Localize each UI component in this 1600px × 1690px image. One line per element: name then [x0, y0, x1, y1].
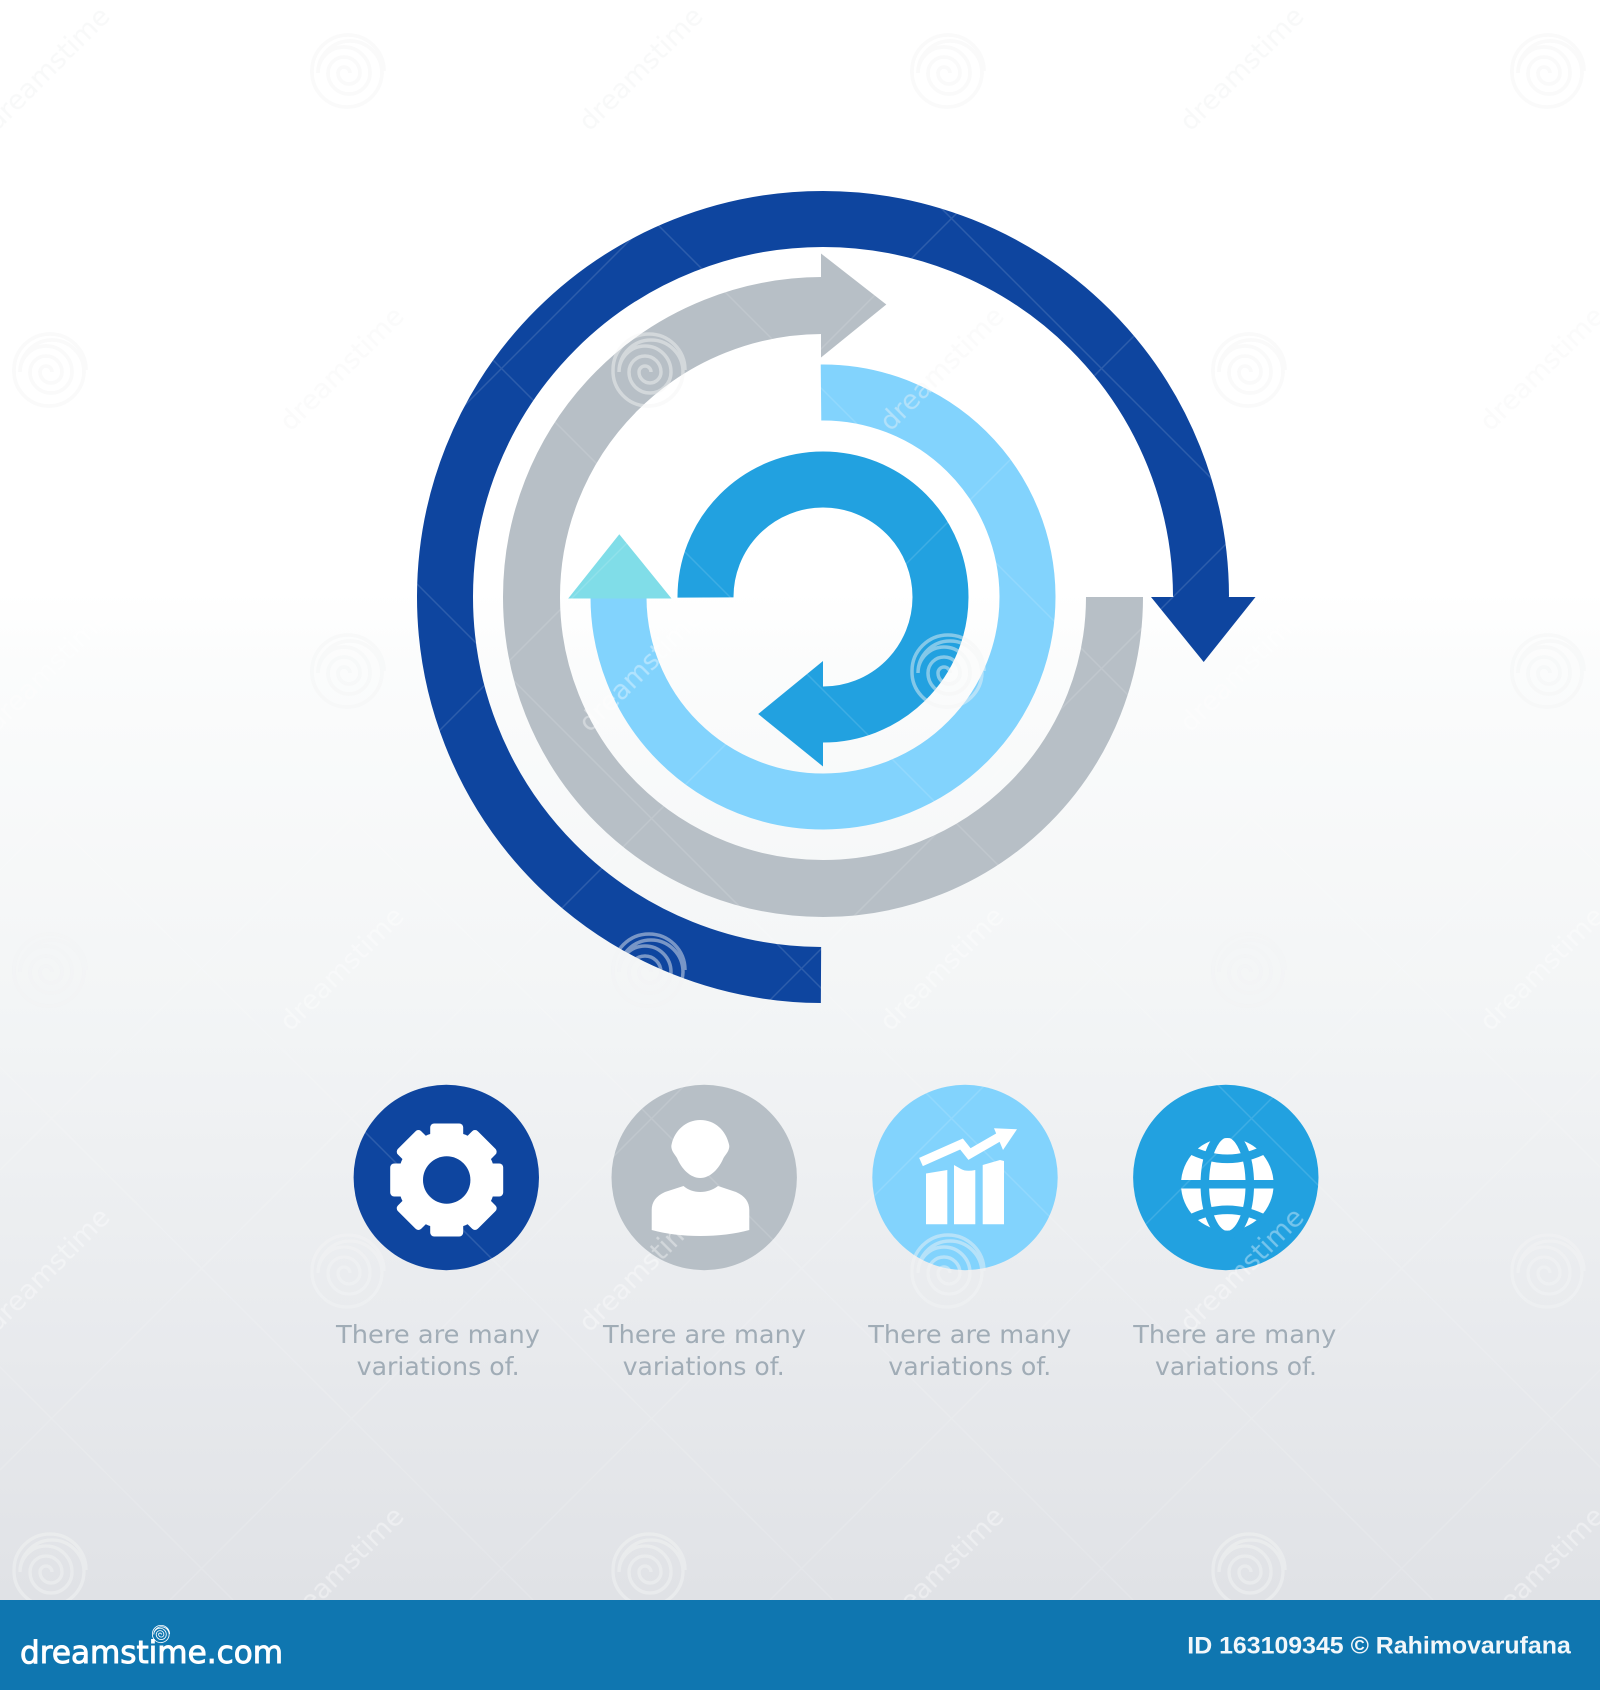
caption 4: There are many — [1132, 1320, 1337, 1349]
caption 3 — [867, 1320, 1072, 1381]
watermark text: dreamstime — [874, 301, 1010, 437]
watermark text: dreamstime — [874, 301, 1010, 437]
icon: globe — [1133, 1085, 1319, 1270]
watermark text: dreamstime — [1174, 1202, 1310, 1338]
caption 1: There are many — [335, 1320, 540, 1349]
watermark text: dreamstime — [274, 301, 410, 437]
watermark text: dreamstime — [274, 901, 410, 1037]
caption 2 — [602, 1320, 806, 1381]
watermark text: dreamstime — [274, 301, 410, 437]
icon: bar chart with arrow — [872, 1085, 1058, 1270]
icon: gear — [354, 1085, 539, 1270]
watermark text: dreamstime — [274, 1501, 410, 1637]
watermark text: dreamstime — [1174, 1, 1310, 137]
arrow: gray — [532, 254, 1114, 888]
icon: person — [612, 1085, 797, 1270]
circular arrow diagram — [445, 219, 1255, 975]
watermark text: dreamstime — [874, 901, 1010, 1037]
caption 2: variations of. — [623, 1352, 785, 1381]
caption 1: variations of. — [357, 1352, 520, 1381]
watermark text: dreamstime — [573, 602, 709, 738]
caption 3: There are many — [867, 1320, 1072, 1349]
watermark text: dreamstime — [874, 1501, 1010, 1637]
footer credit: ID 163109345 © Rahimovarufana — [1187, 1632, 1571, 1660]
arrow: inner blue — [705, 480, 940, 766]
caption 4: variations of. — [1155, 1352, 1317, 1381]
watermark text: dreamstime — [573, 1202, 709, 1338]
footer logo spiral — [152, 1625, 170, 1643]
footer logo text: dreamstime.com — [20, 1635, 283, 1671]
watermark text: dreamstime — [1174, 602, 1310, 738]
footer bar — [0, 1600, 1600, 1690]
caption 1 — [335, 1320, 540, 1381]
caption 4 — [1132, 1320, 1337, 1381]
watermark text: dreamstime — [573, 1, 709, 137]
caption 3: variations of. — [888, 1352, 1051, 1381]
arrow: light blue — [568, 392, 1027, 801]
caption 2: There are many — [602, 1320, 806, 1349]
arrow: outer dark blue — [445, 219, 1255, 975]
